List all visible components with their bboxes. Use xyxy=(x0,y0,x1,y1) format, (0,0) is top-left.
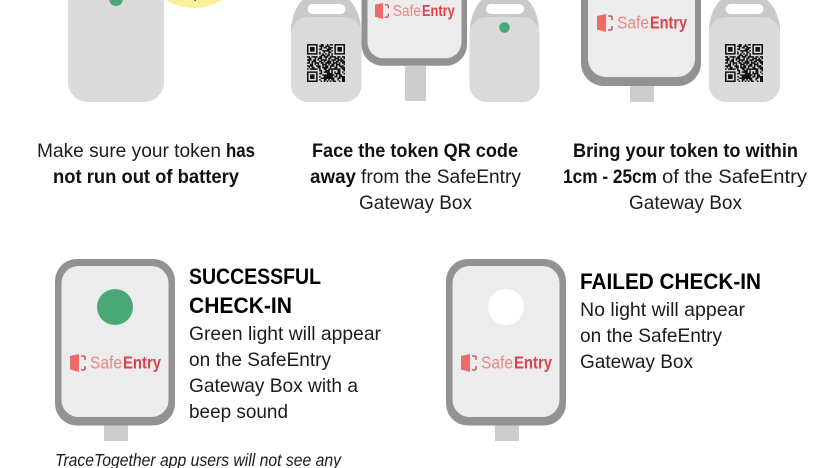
green light xyxy=(97,289,133,325)
step 3 caption: of the SafeEntry xyxy=(662,166,807,188)
gateway box stand xyxy=(495,425,519,441)
failed description: No light will appear xyxy=(580,299,745,321)
step 2: face the QR code xyxy=(291,0,540,214)
successful description: on the SafeEntry xyxy=(189,349,331,371)
gateway box stand xyxy=(104,425,128,441)
step 3 caption: 1cm - 25cm xyxy=(563,166,657,188)
token with QR code xyxy=(291,0,362,102)
step 2 caption: Gateway Box xyxy=(359,192,472,214)
SafeEntry logo: Safe xyxy=(617,13,649,33)
gateway box xyxy=(362,0,467,66)
SafeEntry logo xyxy=(70,353,161,373)
step 3 caption: Bring your token to within xyxy=(573,140,798,162)
SafeEntry logo: Safe xyxy=(393,3,421,20)
SafeEntry logo: Entry xyxy=(123,353,161,373)
failed description xyxy=(580,299,745,373)
token device xyxy=(68,0,164,102)
token with green light xyxy=(470,0,540,102)
successful description: Green light will appear xyxy=(189,323,381,345)
gateway box stand xyxy=(405,66,426,101)
step 2 caption: away xyxy=(310,166,356,188)
SafeEntry logo: Safe xyxy=(90,353,122,373)
SafeEntry logo: Safe xyxy=(481,353,513,373)
successful heading xyxy=(189,264,321,318)
step 1 caption: Make sure your token xyxy=(37,140,221,162)
successful description: Gateway Box with a xyxy=(189,375,358,397)
gateway box xyxy=(446,259,566,426)
step 3 caption xyxy=(563,140,807,214)
SafeEntry logo: Entry xyxy=(650,13,687,33)
failed description: on the SafeEntry xyxy=(580,325,722,347)
green status light xyxy=(109,0,123,6)
failed description: Gateway Box xyxy=(580,351,693,373)
step 3 caption: Gateway Box xyxy=(629,192,742,214)
gateway box xyxy=(581,0,701,86)
battery indicator bubble xyxy=(140,0,248,8)
successful description: beep sound xyxy=(189,401,288,423)
SafeEntry logo xyxy=(375,3,455,20)
SafeEntry logo xyxy=(461,353,552,373)
step 1 caption: has xyxy=(226,140,255,162)
step 2 caption: Face the token QR code xyxy=(312,140,518,162)
successful heading: CHECK-IN xyxy=(189,293,292,318)
SafeEntry logo xyxy=(597,13,687,33)
step 1 caption: not run out of battery xyxy=(53,166,239,188)
step 1 caption xyxy=(37,140,255,188)
successful check-in panel xyxy=(55,259,381,468)
successful heading: SUCCESSFUL xyxy=(189,264,321,289)
failed heading: FAILED CHECK-IN xyxy=(580,269,761,294)
token with QR code xyxy=(709,0,780,102)
step 1: battery check xyxy=(37,0,255,188)
gateway box xyxy=(55,259,175,426)
step 2 caption: from the SafeEntry xyxy=(361,166,521,188)
gateway box stand xyxy=(630,86,654,102)
SafeEntry logo: Entry xyxy=(422,3,455,20)
successful description xyxy=(189,323,381,423)
SafeEntry logo: Entry xyxy=(514,353,552,373)
failed check-in panel xyxy=(446,259,761,441)
step 2 caption xyxy=(310,140,521,214)
unlit light xyxy=(488,289,524,325)
step 3: bring token close xyxy=(563,0,807,214)
